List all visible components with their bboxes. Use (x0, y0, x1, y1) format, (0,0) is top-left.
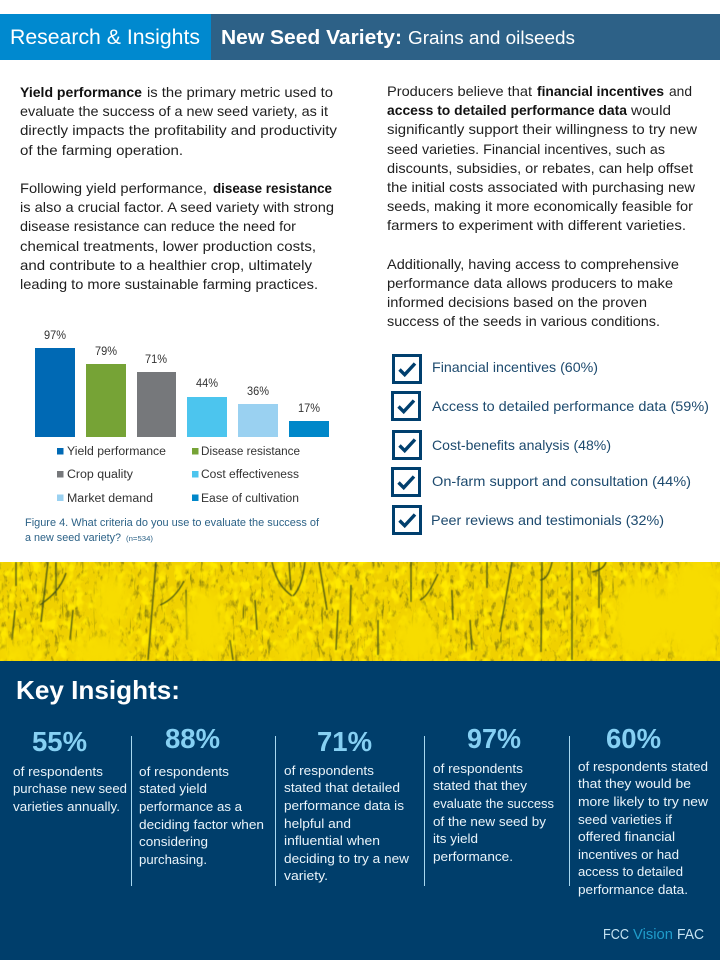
checklist item: cost-benefits analysis (394, 432, 611, 458)
insight: 60% (578, 723, 709, 897)
insight: 71%: performance data is (284, 798, 405, 813)
text block: performance data: success of the seeds in various conditions. (387, 313, 660, 329)
bar chart: 44% (196, 378, 218, 390)
bar chart: 79% (95, 346, 117, 358)
text block: disease resistance: disease resistance (213, 180, 332, 196)
insight: 60%: offered financial (578, 829, 675, 844)
insight: 60%: incentives or had (578, 847, 679, 862)
text block: disease resistance (20, 180, 334, 292)
logo: FCC Vision FAC (603, 926, 704, 943)
insight: 88%: 88% (165, 723, 220, 754)
insight: 97% (433, 723, 554, 864)
insight: 88%: stated yield (139, 781, 207, 796)
checklist item: financial incentives: Financial incentives (60%) (432, 359, 598, 375)
checklist item: peer reviews: Peer reviews and testimonials (32%) (431, 512, 664, 528)
checklist item: performance data (392, 392, 709, 420)
photo: canola field (0, 562, 720, 661)
insight: 55%: of respondents (13, 764, 104, 779)
panel: key insights (0, 661, 720, 960)
text block: disease resistance: disease resistance can reduce the need for (20, 218, 296, 234)
text block: yield performance: evaluate the success of a new seed variety, as it (20, 103, 328, 119)
text block: financial incentives: farmers to experiment with different varieties. (387, 217, 686, 233)
insight: 71%: variety. (284, 868, 328, 883)
insight: 88%: deciding factor when (139, 817, 264, 832)
text block: performance data: Additionally, having access to comprehensive (387, 256, 679, 272)
logo: FCC Vision FAC: FAC (677, 926, 704, 943)
text block: yield performance: Yield performance (20, 84, 142, 100)
insight: 55%: 55% (32, 726, 87, 757)
bar chart: 36% (247, 386, 269, 398)
text block: disease resistance: is also a crucial factor. A seed variety with strong (20, 199, 334, 215)
text block: financial incentives: Producers believe that (387, 83, 532, 99)
insight: 55% (13, 726, 127, 814)
logo: FCC Vision FAC: Vision (633, 926, 673, 943)
insight: 71%: helpful and (284, 816, 351, 831)
text block: financial incentives: seeds, making it more economically feasible for (387, 198, 693, 214)
chart legend: Cost effectiveness (201, 469, 299, 481)
checklist item: peer reviews (394, 506, 664, 534)
checklist item: financial incentives (394, 356, 598, 382)
text block: performance data: performance data allows producers to make (387, 275, 673, 291)
text block: yield performance: directly impacts the profitability and productivity (20, 122, 337, 138)
text block: financial incentives: access to detailed performance data (387, 102, 627, 118)
logo: FCC Vision FAC: FCC (603, 926, 629, 943)
insight: 55%: varieties annually. (13, 799, 120, 814)
chart legend: Market demand (67, 493, 153, 505)
insight: 71%: deciding to try a new (284, 851, 410, 866)
insight: 71%: of respondents (284, 763, 375, 778)
insight: 60%: performance data. (578, 882, 688, 897)
insight: 88%: of respondents (139, 764, 230, 779)
insight: 60%: of respondents stated (578, 759, 708, 774)
insight: 97%: of respondents (433, 761, 524, 776)
bar chart: 97% (44, 330, 66, 342)
text block: disease resistance: leading to more sustainable farming practices. (20, 276, 318, 292)
chart legend: Yield performance (67, 446, 166, 458)
text block: financial incentives: the initial costs associated with purchasing new (387, 179, 696, 195)
chart legend: Crop quality (67, 469, 133, 481)
insight: 71%: influential when (284, 833, 380, 848)
text block: financial incentives: discounts, subsidies, or rebates, can help offset (387, 160, 693, 176)
heading: key insights: Key Insights: (16, 675, 180, 705)
insight: 97%: of the new seed by (433, 814, 547, 829)
text block: yield performance: is the primary metric used to (147, 84, 333, 100)
checklist item: cost-benefits analysis: Cost-benefits analysis (48%) (432, 437, 611, 453)
chart legend: Ease of cultivation (201, 493, 299, 505)
chart legend: Disease resistance (201, 446, 300, 458)
bar chart (35, 330, 329, 437)
insight: 97%: its yield (433, 831, 478, 846)
insight: 88%: purchasing. (139, 852, 207, 867)
insight: 88% (139, 723, 264, 867)
insight: 97%: evaluate the success (433, 796, 554, 811)
header subtitle: Grains and oilseeds (408, 27, 575, 48)
checklist item: on-farm support (392, 468, 691, 496)
header label: Research & Insights: Research & Insights (10, 26, 200, 49)
chart legend (57, 446, 300, 505)
insight: 71% (284, 726, 410, 883)
checklist (392, 356, 709, 534)
text block: financial incentives: seed varieties. Financial incentives, such as (387, 141, 665, 157)
text block: financial incentives: financial incentives (537, 83, 664, 99)
figure caption: Figure 4. What criteria do you use to evaluate the success of (25, 517, 320, 529)
insight: 55%: purchase new seed (13, 781, 127, 796)
text block: performance data: informed decisions based on the proven (387, 294, 647, 310)
text block: disease resistance: Following yield performance, (20, 180, 207, 196)
text block: yield performance: of the farming operation. (20, 142, 183, 158)
text block: disease resistance: chemical treatments, lower production costs, (20, 238, 316, 254)
bar chart: 71% (145, 354, 167, 366)
checklist item: performance data: Access to detailed performance data (59%) (432, 398, 709, 414)
figure caption: (n=534) (126, 534, 154, 543)
insight: 60%: that they would be (578, 776, 691, 791)
insight: 88%: considering (139, 834, 208, 849)
text block: financial incentives (387, 83, 698, 233)
insight: 60%: more likely to try new (578, 794, 709, 809)
insight: 97%: performance. (433, 849, 513, 864)
figure caption (25, 517, 320, 544)
insight: 71%: stated that detailed (284, 780, 400, 795)
insight: 97%: 97% (467, 723, 521, 754)
bar chart: 17% (298, 403, 320, 415)
text block: financial incentives: significantly support their willingness to try new (387, 121, 698, 137)
insight: 71%: 71% (317, 726, 372, 757)
header title: New Seed Variety: (221, 27, 402, 49)
text block: financial incentives: and (669, 83, 692, 99)
text block: yield performance (20, 84, 337, 158)
checklist item: on-farm support: On-farm support and consultation (44%) (432, 473, 691, 489)
text block: financial incentives: would (630, 102, 671, 118)
insight: 60%: seed varieties if (578, 812, 672, 827)
figure caption: a new seed variety? (25, 532, 121, 544)
insight: 97%: stated that they (433, 778, 528, 793)
header banner (0, 14, 720, 60)
insight: 60%: access to detailed (578, 864, 683, 879)
text block: disease resistance: and contribute to a healthier crop, ultimately (20, 257, 312, 273)
insight: 60%: 60% (606, 723, 661, 754)
insight: 88%: performance as a (139, 799, 243, 814)
text block: performance data (387, 256, 679, 329)
